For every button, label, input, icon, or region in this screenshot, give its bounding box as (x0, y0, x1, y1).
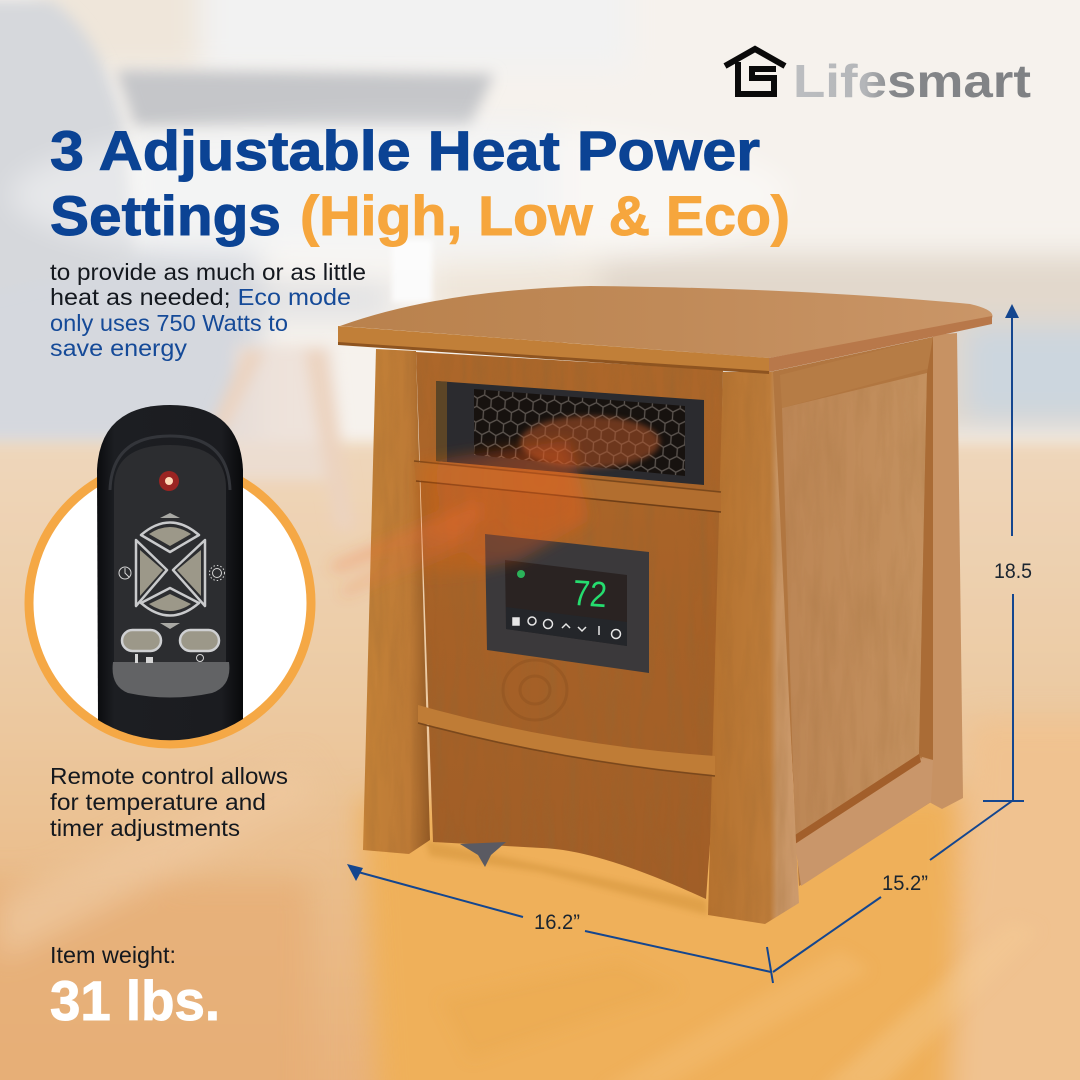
heater floor shadow (425, 840, 708, 915)
remote caption: Remote control allows (50, 763, 288, 789)
remote caption: for temperature and (50, 789, 266, 815)
remote caption: timer adjustments (50, 815, 240, 841)
heat glow rays (330, 440, 590, 596)
sun icon (210, 566, 224, 580)
brand name: Lifesmart (793, 55, 1031, 107)
dimension: width 16.2 (347, 864, 773, 983)
clock icon (119, 567, 131, 579)
intro text: to provide as much or as little (50, 259, 366, 285)
lower buttons (122, 630, 219, 651)
top surface (338, 286, 993, 374)
title (50, 119, 790, 247)
heading glow (10, 120, 790, 270)
title: 3 Adjustable Heat Power (50, 119, 760, 182)
direction buttons (136, 522, 205, 616)
remote face (114, 445, 226, 665)
remote callout circle (29, 462, 311, 744)
item weight (50, 942, 220, 1032)
bottom foot vent (460, 842, 506, 867)
item weight: Item weight: (50, 942, 176, 968)
upper rail (414, 461, 721, 512)
dimension: depth 15.2 (773, 801, 1012, 972)
item weight: 31 lbs. (50, 969, 220, 1032)
intro text (50, 259, 366, 361)
dimension: height 18.5: 18.5 (994, 560, 1032, 583)
control buttons (513, 617, 620, 638)
remote control (97, 405, 243, 740)
infrared grille (436, 381, 704, 485)
LED readout 72: 72 (572, 572, 608, 615)
dimension: width 16.2: 16.2” (534, 911, 580, 934)
icon: house (725, 49, 785, 94)
lower labels (135, 654, 204, 663)
logo (725, 49, 1031, 107)
control panel (485, 534, 649, 673)
right side panel (770, 333, 963, 886)
heater cabinet (338, 286, 993, 925)
remote caption (50, 763, 288, 841)
lower rail (418, 705, 715, 776)
front panel (415, 350, 725, 900)
LED (159, 471, 179, 491)
left leg (362, 348, 432, 856)
intro text: save energy (50, 335, 188, 361)
title: Settings (50, 184, 281, 247)
intro text: heat as needed; Eco mode (50, 284, 351, 310)
dimension: height 18.5 (983, 304, 1032, 801)
small arrows (160, 513, 180, 629)
intro text: only uses 750 Watts to (50, 310, 288, 336)
right front leg (706, 372, 801, 925)
dimension: depth 15.2: 15.2” (882, 872, 928, 895)
remote shoulder ring (110, 436, 230, 490)
title: (High, Low & Eco) (300, 184, 790, 247)
fan indicator (517, 570, 525, 578)
